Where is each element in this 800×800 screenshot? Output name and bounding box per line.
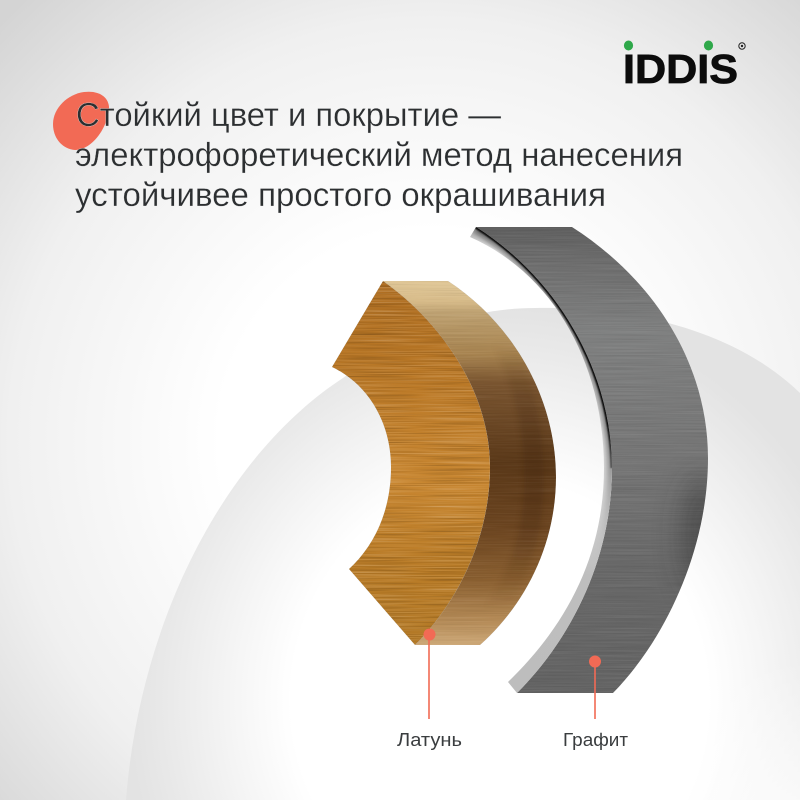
accent blob: [53, 92, 109, 150]
callout: brass: Латунь: [397, 729, 462, 750]
title: электрофоретический метод нанесения: [75, 137, 683, 174]
disc corner highlight: [620, 650, 800, 800]
callout: brass: [397, 628, 462, 750]
callout: graphite: [563, 656, 629, 750]
brass sample: [332, 281, 556, 645]
brass side wall: [383, 281, 556, 645]
title: устойчивее простого окрашивания: [75, 177, 606, 214]
graphite front face: [476, 227, 722, 693]
graphite inner bevel: [470, 227, 612, 693]
callout: graphite: Графит: [563, 729, 629, 750]
title: [75, 97, 683, 214]
background disc: [126, 308, 800, 800]
graphite sample: [470, 227, 722, 693]
logo: IDDIS: IDDIS: [623, 46, 738, 92]
brass front face: [332, 281, 490, 645]
title: Стойкий цвет и покрытие —: [76, 97, 501, 134]
